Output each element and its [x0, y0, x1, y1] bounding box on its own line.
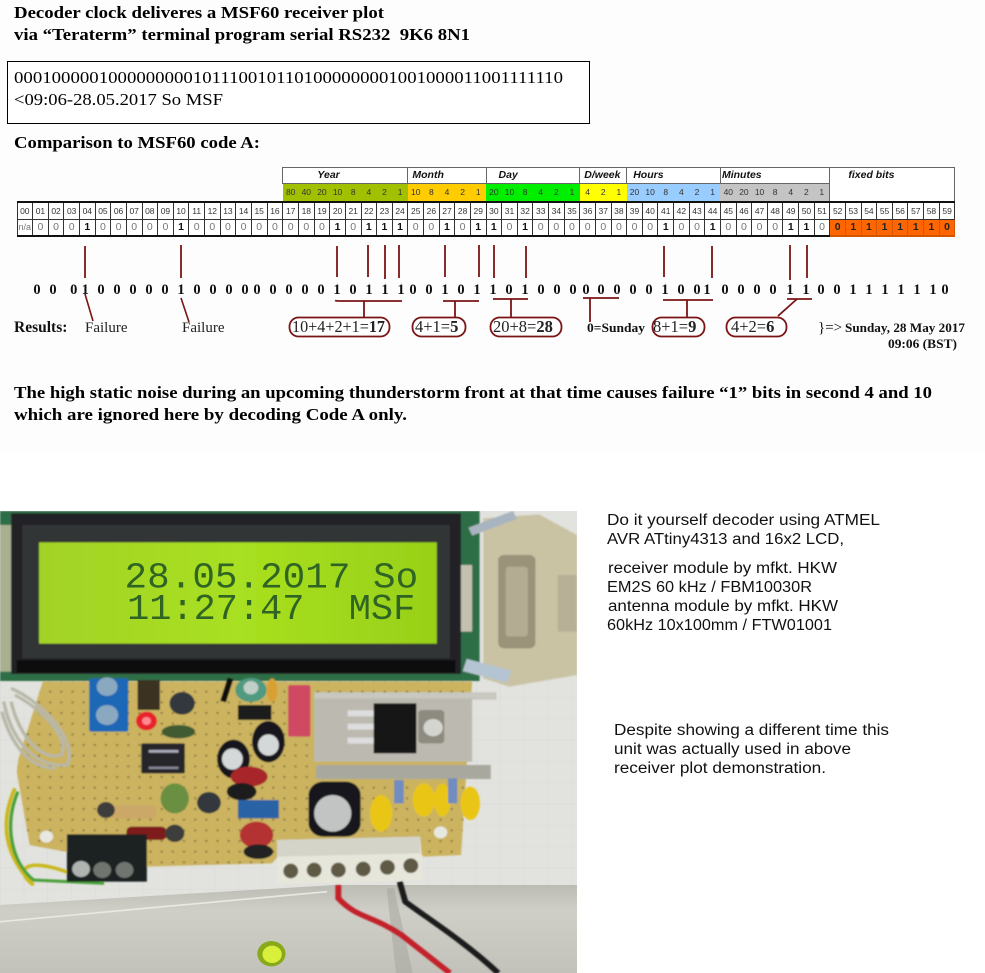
day decode: 20+8=28 — [493, 317, 553, 336]
MSF60 code A table: 40 — [645, 206, 655, 216]
MSF60 code A table: 4 — [445, 187, 449, 197]
MSF60 code A table — [17, 167, 955, 237]
text block: decoder description: Do it yourself decoder using ATMEL — [607, 512, 880, 529]
MSF60 code A table: 0 — [553, 221, 559, 233]
text block: receiver and antenna modules: EM2S 60 kHz / FBM10030R — [607, 579, 812, 596]
MSF60 code A table: 09 — [161, 206, 170, 216]
failure connectors — [85, 294, 189, 322]
MSF60 code A table: fixed bits — [848, 169, 894, 181]
background paper and case lid — [0, 511, 577, 973]
MSF60 code A table: 37 — [598, 206, 608, 216]
MSF60 code A table: 41 — [661, 206, 670, 216]
power-on green LED — [257, 941, 286, 966]
MSF60 code A table: 31 — [505, 206, 514, 216]
MSF60 code A table: 0 — [819, 221, 825, 233]
MSF60 code A table: 46 — [739, 206, 749, 216]
MSF60 code A table: 2 — [554, 187, 559, 197]
decoding annotation — [14, 245, 965, 424]
MSF60 code A table: 17 — [286, 206, 295, 216]
MSF60 code A table: 23 — [380, 206, 389, 216]
MSF60 code A table: 05 — [98, 206, 108, 216]
MSF60 code A table: 0 — [303, 221, 309, 233]
MSF60 code A table: 22 — [364, 206, 374, 216]
explanation paragraph: The high static noise during an upcoming thunderstorm front at that time causes failure “1” bits in second 4 and 10 — [14, 383, 932, 402]
MSF60 code A table: 0 — [569, 221, 575, 233]
MSF60 code A table: 1 — [570, 187, 574, 197]
marker lines from table to bit row — [85, 245, 807, 280]
LCD readout: 28.05.2017 So — [125, 558, 418, 599]
MSF60 code A table: 0 — [632, 221, 637, 233]
MSF60 code A table: 8 — [429, 187, 434, 197]
regulator heatsink — [314, 692, 496, 779]
MSF60 code A table: 1 — [444, 221, 450, 233]
MSF60 code A table: 2 — [382, 187, 387, 197]
failure notes — [85, 320, 225, 336]
MSF60 code A table: 2 — [695, 187, 699, 197]
MSF60 code A table: 2 — [601, 187, 606, 197]
perfboard — [17, 682, 472, 867]
MSF60 code A table: 52 — [833, 206, 842, 216]
MSF60 code A table: 0 — [538, 221, 544, 233]
MSF60 code A table: 48 — [770, 206, 780, 216]
MSF60 code A table: 1 — [398, 187, 402, 197]
year decode: 10+4+2+1=17 — [292, 317, 385, 336]
MSF60 code A table: 35 — [567, 206, 577, 216]
MSF60 code A table: 1 — [710, 187, 715, 197]
heading: decoder clock plot: via “Teraterm” terminal program serial RS232 9K6 8N1 — [14, 25, 470, 44]
MSF60 code A table: 0 — [38, 221, 43, 233]
text block: decoder description — [607, 512, 880, 548]
MSF60 code A table: 0 — [288, 221, 294, 233]
MSF60 code A table: 0 — [194, 221, 200, 233]
MSF60 code A table: 8 — [351, 187, 356, 197]
MSF60 code A table: 29 — [473, 206, 483, 216]
MSF60 code A table: Day — [499, 169, 518, 181]
text block: photo note — [614, 722, 889, 777]
MSF60 code A table: 16 — [270, 206, 280, 216]
MSF60 code A table: 1 — [866, 221, 872, 233]
MSF60 code A table: 55 — [880, 206, 889, 216]
MSF60 code A table: 47 — [755, 206, 764, 216]
MSF60 code A table: 0 — [53, 221, 59, 233]
MSF60 code A table: 1 — [335, 221, 340, 233]
MSF60 code A table: 15 — [254, 206, 264, 216]
MSF60 code A table: 08 — [145, 206, 155, 216]
MSF60 code A table: 1 — [913, 221, 919, 233]
decoded result: Sunday, 28 May 2017 — [845, 321, 965, 335]
MSF60 code A table: 11 — [192, 206, 201, 216]
MSF60 code A table: 10 — [333, 187, 342, 197]
MSF60 code A table: 59 — [942, 206, 952, 216]
decoded result: 09:06 (BST) — [888, 337, 957, 351]
MSF60 code A table: n/a — [19, 222, 31, 232]
MSF60 code A table: 04 — [83, 206, 92, 216]
month decode: 4+1=5 — [415, 317, 458, 336]
MSF60 code A table: 20 — [489, 187, 499, 197]
MSF60 code A table: 8 — [773, 187, 778, 197]
MSF60 code A table: 57 — [911, 206, 921, 216]
MSF60 code A table: 0 — [209, 221, 215, 233]
terminal output box: 00010000010000000001011100101101000000001001000011001111110 — [14, 68, 563, 87]
trim pots, LED and small parts — [89, 677, 310, 738]
MSF60 code A table: 00 — [20, 206, 30, 216]
MSF60 code A table: 40 — [302, 187, 311, 197]
MSF60 code A table: 01 — [36, 206, 45, 216]
MSF60 code A table: Minutes — [722, 169, 762, 181]
MSF60 code A table: 24 — [395, 206, 405, 216]
MSF60 code A table: 1 — [491, 221, 497, 233]
MSF60 code A table: 28 — [458, 206, 467, 216]
hours decode — [652, 300, 713, 336]
MSF60 code A table: 1 — [178, 221, 184, 233]
MSF60 code A table: 40 — [724, 187, 733, 197]
minutes decode — [726, 299, 812, 336]
MSF60 code A table: 0 — [678, 221, 684, 233]
MSF60 code A table: 80 — [286, 187, 295, 197]
minutes decode: 4+2=6 — [731, 317, 774, 336]
MSF60 code A table: 45 — [724, 206, 733, 216]
hours decode: 8+1=9 — [653, 317, 696, 336]
antenna coil wire — [2, 688, 69, 768]
LCD readout — [125, 558, 418, 630]
decoded result — [818, 320, 965, 351]
MSF60 code A table: 4 — [788, 187, 793, 197]
MSF60 code A table: 26 — [427, 206, 436, 216]
MSF60 code A table: 1 — [84, 221, 90, 233]
MSF60 code A table: 43 — [692, 206, 702, 216]
MSF60 code A table: 49 — [786, 206, 796, 216]
MSF60 code A table: 8 — [663, 187, 668, 197]
failure notes: Failure — [182, 320, 225, 336]
MSF60 code A table: 1 — [819, 187, 824, 197]
day of week decode: 0=Sunday — [587, 320, 646, 335]
MSF60 code A table: 07 — [129, 206, 139, 216]
MSF60 code A table: 1 — [897, 221, 903, 233]
text block: photo note: receiver plot demonstration. — [614, 760, 826, 777]
MSF60 code A table: Year — [317, 169, 340, 181]
MSF60 code A table: D/week — [584, 169, 620, 181]
MSF60 code A table: 1 — [850, 221, 856, 233]
MSF60 code A table: 32 — [520, 206, 530, 216]
MSF60 code A table: 39 — [630, 206, 639, 216]
MSF60 code A table: 0 — [507, 221, 512, 233]
text block: decoder description: AVR ATtiny4313 and 16x2 LCD, — [607, 531, 844, 548]
MSF60 code A table: 18 — [302, 206, 311, 216]
electrolytic capacitors — [217, 721, 361, 837]
LCD readout: 11:27:47 MSF — [127, 590, 415, 630]
decoded result: }=> — [818, 320, 842, 336]
MSF60 code A table: 33 — [536, 206, 545, 216]
MSF60 code A table: 4 — [585, 187, 590, 197]
MSF60 code A table: 1 — [522, 221, 528, 233]
MSF60 code A table: 4 — [366, 187, 371, 197]
MSF60 code A table: 02 — [51, 206, 61, 216]
MSF60 code A table: 10 — [755, 187, 764, 197]
MSF60 code A table: 54 — [864, 206, 874, 216]
MSF60 code A table: 0 — [319, 221, 325, 233]
MSF60 code A table: 10 — [411, 187, 420, 197]
text block: photo note: Despite showing a different time this — [614, 722, 889, 739]
MSF60 code A table: 0 — [725, 221, 731, 233]
LCD module — [0, 511, 480, 681]
MSF60 code A table: 38 — [614, 206, 624, 216]
MSF60 code A table: 1 — [476, 187, 481, 197]
MSF60 code A table: 1 — [928, 221, 934, 233]
MSF60 code A table: 20 — [317, 187, 327, 197]
yellow and red bead capacitors — [97, 767, 480, 859]
MSF60 code A table: 14 — [239, 206, 248, 216]
MSF60 code A table: Month — [412, 169, 444, 181]
heading: decoder clock plot — [14, 3, 470, 44]
text block: photo note: unit was actually used in above — [614, 741, 851, 758]
MSF60 code A table: 8 — [523, 187, 527, 197]
MSF60 code A table: 1 — [397, 221, 403, 233]
MSF60 code A table: 0 — [100, 221, 106, 233]
explanation paragraph: which are ignored here by decoding Code A only. — [14, 405, 407, 424]
MSF60 code A table: 44 — [708, 206, 717, 216]
MSF60 code A table: 0 — [225, 221, 231, 233]
MSF60 code A table: 06 — [114, 206, 123, 216]
terminal output box — [7, 61, 590, 124]
MSF60 code A table: 58 — [927, 206, 936, 216]
photo: home-made decoder board with LCD — [0, 511, 577, 973]
MSF60 code A table: 19 — [317, 206, 327, 216]
text block: receiver and antenna modules — [607, 560, 838, 634]
MSF60 code A table: 0 — [256, 221, 262, 233]
MSF60 code A table: 1 — [382, 221, 387, 233]
MSF60 code A table: 1 — [882, 221, 887, 233]
failure notes: Failure — [85, 320, 128, 336]
MSF60 code A table: 1 — [663, 221, 669, 233]
results label: Results: — [14, 319, 67, 336]
MSF60 code A table: 0 — [741, 221, 747, 233]
day of week decode — [583, 298, 646, 335]
text block: receiver and antenna modules: 60kHz 10x100mm / FTW01001 — [607, 617, 832, 634]
MSF60 code A table: 2 — [804, 187, 809, 197]
MSF60 code A table: 51 — [817, 206, 827, 216]
MSF60 code A table: 0 — [647, 221, 653, 233]
MSF60 code A table: 03 — [67, 206, 76, 216]
MSF60 code A table: 0 — [272, 221, 278, 233]
MSF60 code A table: 1 — [366, 221, 372, 233]
MSF60 code A table: 0 — [241, 221, 246, 233]
MSF60 code A table: 0 — [694, 221, 700, 233]
MSF60 code A table: 0 — [616, 221, 622, 233]
MSF60 code A table: 0 — [772, 221, 778, 233]
MSF60 code A table: 27 — [442, 206, 452, 216]
MSF60 code A table: 20 — [739, 187, 749, 197]
heading: decoder clock plot: Decoder clock deliveres a MSF60 receiver plot — [14, 3, 384, 22]
MSF60 code A table: 0 — [600, 221, 606, 233]
explanation paragraph — [14, 383, 932, 424]
MSF60 code A table: 0 — [350, 221, 356, 233]
MSF60 code A table: 1 — [804, 221, 809, 233]
MSF60 code A table: 53 — [849, 206, 858, 216]
MSF60 code A table: 0 — [757, 221, 762, 233]
MSF60 code A table: Hours — [633, 169, 664, 181]
day decode — [490, 299, 562, 336]
MSF60 code A table: 0 — [460, 221, 466, 233]
MSF60 code A table: 0 — [585, 221, 591, 233]
heading: comparison: Comparison to MSF60 code A: — [14, 133, 260, 152]
serial connector — [461, 514, 577, 687]
MSF60 code A table: 20 — [630, 187, 639, 197]
month decode — [412, 301, 479, 336]
noise-toned upper background — [0, 0, 985, 452]
MSF60 code A table: 30 — [489, 206, 499, 216]
MSF60 code A table: 34 — [552, 206, 561, 216]
MSF60 code A table: 13 — [223, 206, 233, 216]
MSF60 code A table: 50 — [802, 206, 811, 216]
MSF60 code A table: 1 — [710, 221, 716, 233]
MSF60 code A table: 2 — [460, 187, 465, 197]
MSF60 code A table: 0 — [131, 221, 137, 233]
MSF60 code A table: 1 — [788, 221, 794, 233]
MSF60 code A table: 0 — [835, 221, 841, 233]
text block: receiver and antenna modules: antenna module by mfkt. HKW — [608, 598, 838, 615]
terminal output box: <09:06-28.05.2017 So MSF — [14, 90, 223, 109]
MSF60 code A table: 10 — [176, 206, 186, 216]
MSF60 code A table: 0 — [69, 221, 75, 233]
MSF60 code A table: 0 — [944, 221, 950, 233]
MSF60 code A table: 21 — [348, 206, 358, 216]
MSF60 code A table: 0 — [147, 221, 153, 233]
MSF60 code A table: 10 — [505, 187, 514, 197]
MSF60 code A table: 4 — [538, 187, 543, 197]
text block: receiver and antenna modules: receiver module by mfkt. HKW — [608, 560, 837, 577]
MSF60 code A table: 36 — [583, 206, 592, 216]
MSF60 code A table: 0 — [163, 221, 168, 233]
relay IC — [141, 743, 185, 773]
MSF60 code A table: 42 — [677, 206, 686, 216]
MSF60 code A table: 10 — [645, 187, 655, 197]
MSF60 code A table: 1 — [616, 187, 621, 197]
white screw terminal and power wires — [277, 837, 498, 973]
year decode — [290, 300, 402, 336]
MSF60 code A table: 56 — [895, 206, 905, 216]
MSF60 code A table: 0 — [428, 221, 434, 233]
MSF60 code A table: 4 — [679, 187, 684, 197]
MSF60 code A table: 20 — [333, 206, 342, 216]
MSF60 code A table: 12 — [208, 206, 217, 216]
MSF60 code A table: 1 — [475, 221, 481, 233]
green terminal block and wires — [6, 788, 147, 885]
received bit row: 00010000010000000001011100101101000000001001000011001111110 — [33, 282, 949, 298]
MSF60 code A table: 25 — [411, 206, 420, 216]
MSF60 code A table: 0 — [116, 221, 121, 233]
MSF60 code A table: 0 — [413, 221, 419, 233]
